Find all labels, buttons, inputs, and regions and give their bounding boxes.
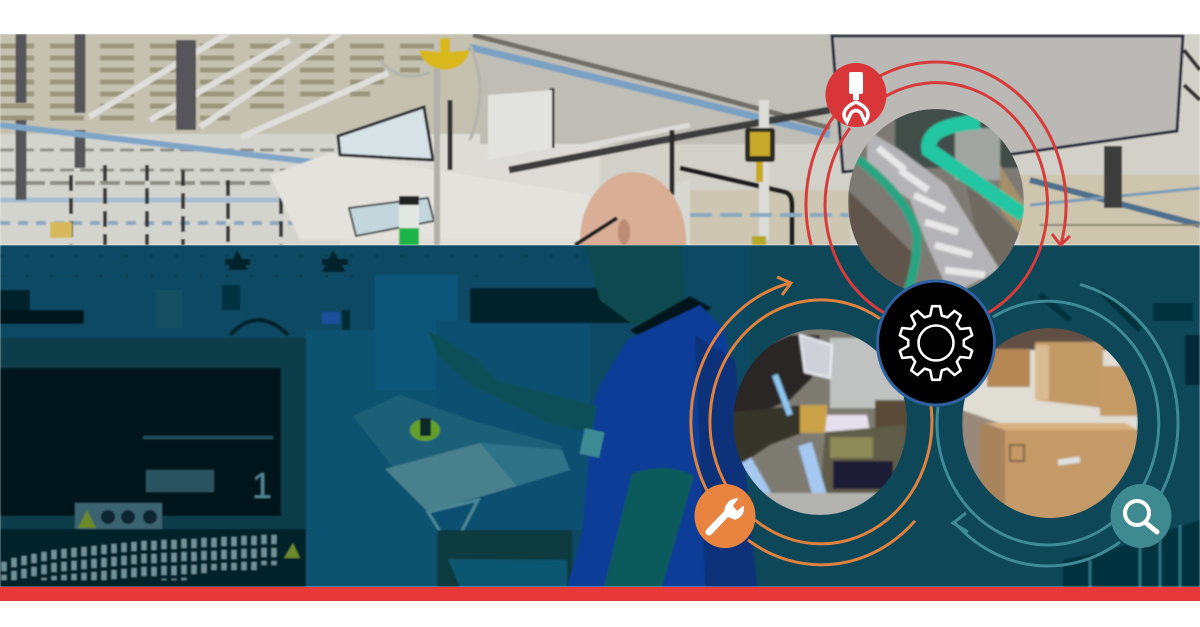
teal arrow head	[953, 513, 968, 532]
teal outer arrow ring	[955, 284, 1178, 566]
red arrow head	[1052, 234, 1070, 245]
signal light	[399, 196, 419, 245]
man's head top	[575, 172, 686, 308]
gear icon	[900, 306, 972, 380]
orange arrow head	[777, 277, 791, 295]
lower monitor	[349, 198, 434, 236]
overhead white beam	[270, 153, 341, 240]
wall monitor	[338, 107, 433, 160]
large overhead screen	[832, 36, 1183, 172]
red outer arrow ring	[806, 62, 1066, 245]
orange outer arrow ring	[691, 283, 915, 565]
teal process cycle	[937, 284, 1178, 566]
upper factory ceiling photo	[0, 34, 1200, 245]
orange inner ring	[710, 300, 932, 544]
wrench icon	[694, 484, 756, 548]
operator arm	[428, 331, 597, 433]
yellow ceiling hook	[419, 38, 470, 70]
machine number: 1	[252, 465, 272, 506]
red base bar	[0, 587, 1200, 601]
boxes photo	[962, 326, 1138, 520]
control panel with keypad	[353, 394, 570, 532]
teal inner ring	[937, 301, 1159, 545]
operator	[428, 245, 757, 587]
machine cabinet	[0, 338, 306, 587]
red conveyor photo	[848, 108, 1025, 300]
orange process cycle	[691, 277, 932, 565]
yellow sensor box	[745, 128, 775, 182]
central gear badge	[878, 281, 994, 405]
lower teal factory photo	[0, 245, 1200, 587]
red inner ring	[825, 83, 1047, 315]
red process cycle	[806, 62, 1070, 315]
machine body column	[306, 330, 436, 587]
warning labels	[75, 503, 162, 529]
welding photo	[733, 329, 908, 517]
red claw icon	[826, 63, 886, 127]
magnifier icon	[1110, 484, 1172, 548]
